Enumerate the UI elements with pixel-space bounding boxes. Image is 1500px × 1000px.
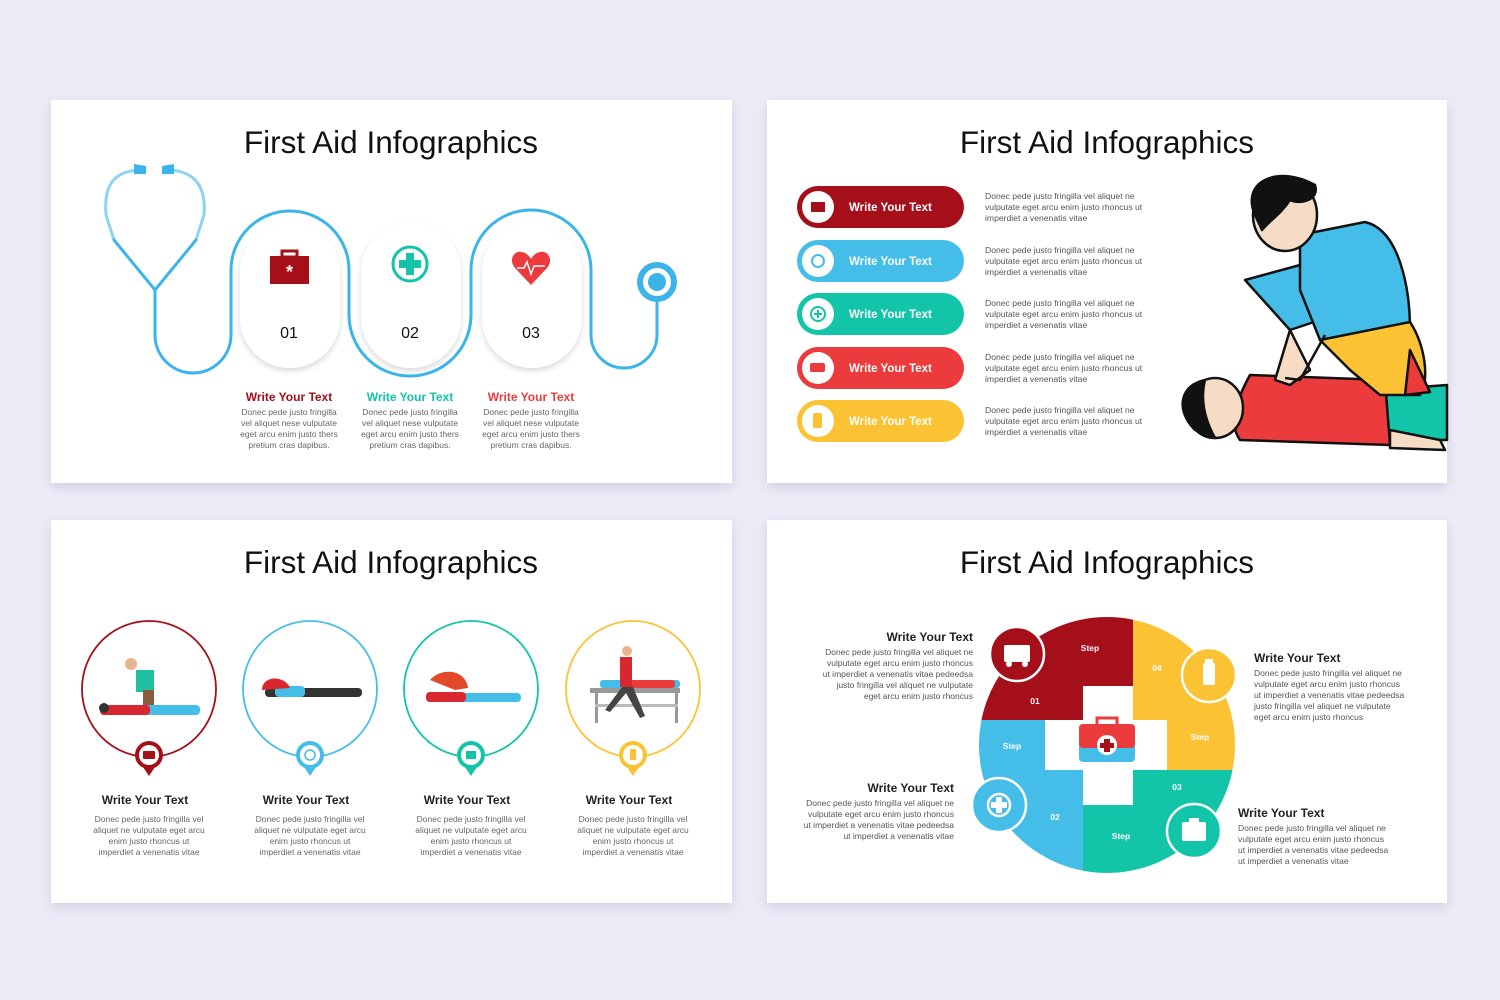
icon: heart	[512, 252, 550, 285]
descriptions: Donec pede justo fringilla vel aliquet ne	[985, 352, 1135, 362]
text blocks: vulputate eget arcu enim justo rhoncus	[827, 658, 973, 668]
panel: CPR list	[767, 100, 1447, 483]
text blocks: Donec pede justo fringilla	[362, 407, 458, 417]
circle diagram: 04	[1152, 663, 1162, 673]
stethoscope	[106, 170, 674, 376]
text blocks: ut imperdiet a venenatis vitae	[843, 831, 954, 841]
text blocks: Donec pede justo fringilla vel	[95, 814, 203, 824]
text blocks: eget arcu enim justo thers	[361, 429, 459, 439]
list pills: Write Your Text	[849, 202, 932, 214]
text blocks: vel aliquet nese vulputate	[241, 418, 337, 428]
list pills: Write Your Text	[849, 309, 932, 321]
text blocks: eget arcu enim justo thers	[482, 429, 580, 439]
text blocks: ut imperdiet a venenatis vitae pedeedsa	[1254, 690, 1405, 700]
descriptions: imperdiet a venenatis vitae	[985, 320, 1087, 330]
descriptions: imperdiet a venenatis vitae	[985, 213, 1087, 223]
title: First Aid Infographics	[960, 544, 1254, 580]
text blocks: aliquet ne vulputate eget arcu	[415, 825, 527, 835]
numbers: 02	[401, 325, 419, 342]
descriptions: vulputate eget arcu enim justo rhoncus ut	[985, 256, 1143, 266]
icon badges	[972, 627, 1236, 858]
panel: circular steps	[767, 520, 1447, 903]
text blocks: Write Your Text	[586, 793, 672, 807]
descriptions: imperdiet a venenatis vitae	[985, 374, 1087, 384]
text blocks: ut imperdiet a venenatis vitae pedeedsa	[804, 820, 954, 830]
circle diagram: Step	[1112, 831, 1130, 841]
text blocks: Write Your Text	[102, 793, 188, 807]
panel: stethoscope steps	[51, 100, 732, 483]
text blocks: ut imperdiet a venenatis vitae	[1238, 856, 1349, 866]
circle diagram: 03	[1172, 782, 1182, 792]
circle diagram: Step	[1003, 741, 1021, 751]
descriptions: imperdiet a venenatis vitae	[985, 267, 1087, 277]
text blocks: Write Your Text	[424, 793, 510, 807]
title: First Aid Infographics	[244, 124, 538, 160]
text blocks: Write Your Text	[263, 793, 349, 807]
text blocks: justo fringilla vel aliquet ne vulputate	[1253, 701, 1391, 711]
descriptions: vulputate eget arcu enim justo rhoncus ut	[985, 309, 1143, 319]
illustration: CPR	[1183, 176, 1447, 450]
text blocks: imperdiet a venenatis vitae	[582, 847, 684, 857]
circle diagram: Step	[1081, 643, 1099, 653]
text blocks: Donec pede justo fringilla vel	[579, 814, 687, 824]
text blocks	[804, 630, 1405, 866]
text blocks: enim justo rhoncus ut	[431, 836, 512, 846]
text blocks: justo fringilla vel aliquet ne vulputate	[835, 680, 973, 690]
text blocks: ut imperdiet a venenatis vitae pedeedsa	[1238, 845, 1389, 855]
text blocks: Donec pede justo fringilla vel aliquet ne	[1238, 823, 1386, 833]
text blocks: Donec pede justo fringilla vel	[256, 814, 364, 824]
scene circles	[82, 621, 700, 757]
text blocks: enim justo rhoncus ut	[109, 836, 190, 846]
numbers	[280, 325, 540, 342]
descriptions: Donec pede justo fringilla vel aliquet ne	[985, 245, 1135, 255]
numbers: 03	[522, 325, 540, 342]
circle diagram: Step	[1191, 732, 1209, 742]
text blocks: vulputate eget arcu enim justo rhoncus	[1238, 834, 1384, 844]
step pills	[240, 222, 582, 368]
circle diagram: 01	[1030, 696, 1040, 706]
text blocks: imperdiet a venenatis vitae	[420, 847, 522, 857]
pin markers	[135, 741, 647, 776]
descriptions: Donec pede justo fringilla vel aliquet ne	[985, 191, 1135, 201]
descriptions: vulputate eget arcu enim justo rhoncus ut	[985, 363, 1143, 373]
text blocks: vel aliquet nese vulputate	[483, 418, 579, 428]
text blocks: Donec pede justo fringilla vel	[417, 814, 525, 824]
text blocks: enim justo rhoncus ut	[270, 836, 351, 846]
numbers: 01	[280, 325, 298, 342]
text blocks: Write Your Text	[488, 390, 574, 404]
descriptions: Donec pede justo fringilla vel aliquet ne	[985, 405, 1135, 415]
icon: plus circle	[393, 247, 427, 281]
illustrations	[99, 646, 680, 723]
text blocks: eget arcu enim justo rhoncus	[1254, 712, 1363, 722]
title: First Aid Infographics	[960, 124, 1254, 160]
text blocks: Donec pede justo fringilla vel aliquet ne	[825, 647, 973, 657]
text blocks: Donec pede justo fringilla	[241, 407, 337, 417]
text blocks: Donec pede justo fringilla	[483, 407, 579, 417]
text blocks: Write Your Text	[1238, 806, 1324, 820]
icon: first aid kit	[270, 251, 309, 284]
icon: first aid kit: *	[286, 262, 293, 282]
circle diagram: 02	[1050, 812, 1060, 822]
icon: center kit	[1079, 718, 1135, 762]
text blocks: eget arcu enim justo thers	[240, 429, 338, 439]
text blocks	[240, 390, 580, 450]
descriptions: Donec pede justo fringilla vel aliquet ne	[985, 298, 1135, 308]
text blocks: Write Your Text	[367, 390, 453, 404]
list pills	[797, 186, 964, 442]
text blocks: vulputate eget arcu enim justo rhoncus	[1254, 679, 1400, 689]
text blocks: Write Your Text	[868, 781, 954, 795]
text blocks: Donec pede justo fringilla vel aliquet ne	[1254, 668, 1402, 678]
text blocks: aliquet ne vulputate eget arcu	[577, 825, 689, 835]
descriptions: imperdiet a venenatis vitae	[985, 427, 1087, 437]
descriptions	[985, 191, 1143, 437]
text blocks: Write Your Text	[1254, 651, 1340, 665]
text blocks: imperdiet a venenatis vitae	[98, 847, 200, 857]
panel: four scenes	[51, 520, 732, 903]
descriptions: vulputate eget arcu enim justo rhoncus ut	[985, 202, 1143, 212]
text blocks: vel aliquet nese vulputate	[362, 418, 458, 428]
text blocks: pretium cras dapibus.	[490, 440, 572, 450]
title: First Aid Infographics	[244, 544, 538, 580]
text blocks: Write Your Text	[246, 390, 332, 404]
text blocks: Write Your Text	[887, 630, 973, 644]
text blocks: pretium cras dapibus.	[369, 440, 451, 450]
text blocks: ut imperdiet a venenatis vitae pedeedsa	[823, 669, 973, 679]
list pills: Write Your Text	[849, 416, 932, 428]
text blocks: imperdiet a venenatis vitae	[259, 847, 361, 857]
text blocks: aliquet ne vulputate eget arcu	[254, 825, 366, 835]
text blocks: Donec pede justo fringilla vel aliquet ne	[806, 798, 954, 808]
text blocks	[93, 793, 689, 857]
descriptions: vulputate eget arcu enim justo rhoncus ut	[985, 416, 1143, 426]
text blocks: enim justo rhoncus ut	[593, 836, 674, 846]
list pills: Write Your Text	[849, 363, 932, 375]
circle diagram	[970, 610, 1243, 880]
list pills: Write Your Text	[849, 256, 932, 268]
text blocks: eget arcu enim justo rhoncus	[864, 691, 973, 701]
text blocks: vulputate eget arcu enim justo rhoncus	[808, 809, 954, 819]
text blocks: aliquet ne vulputate eget arcu	[93, 825, 205, 835]
text blocks: pretium cras dapibus.	[248, 440, 330, 450]
